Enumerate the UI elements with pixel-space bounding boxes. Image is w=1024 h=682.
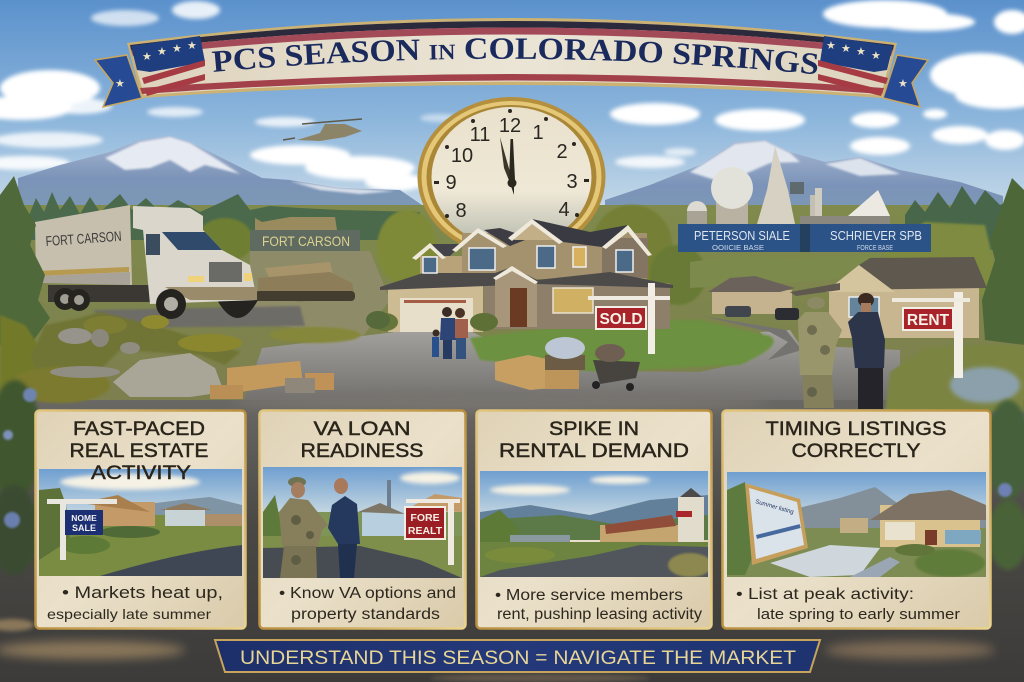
title: PCS SEASON IN COLORADO SPRINGS (212, 38, 818, 74)
scene: home for sale: NOME (71, 513, 97, 523)
bullet text (495, 587, 702, 623)
heading: READINESS (300, 440, 424, 462)
clock (418, 97, 606, 257)
bullet text: property standards (291, 606, 440, 623)
banner stars: ★ (871, 49, 881, 62)
moving boxes, left (210, 361, 334, 399)
banner stars: ★ (115, 77, 125, 90)
rocks (50, 328, 224, 397)
bullet text: • Markets heat up, (62, 583, 223, 602)
sky with clouds (0, 0, 1024, 240)
right shrubs (885, 178, 1024, 570)
scene: listing document and house: Summer listing (754, 499, 794, 516)
sign: Peterson and Schriever bases: PETERSON SIALE (694, 229, 790, 243)
mid houses (708, 276, 799, 320)
ground base (0, 205, 1024, 405)
bullet text: • List at peak activity: (736, 586, 914, 603)
truck (35, 205, 258, 319)
panel: fast-paced real estate activity (36, 410, 246, 628)
heading: CORRECTLY (792, 440, 920, 462)
road and driveway (93, 306, 900, 412)
panel: timing listings correctly (722, 410, 990, 628)
scene: listing document and house (727, 472, 986, 578)
sign: Fort Carson base (250, 217, 360, 251)
tank (255, 262, 355, 302)
heading: FAST-PACED (73, 418, 205, 440)
bullet text: • Know VA options and (279, 585, 456, 602)
sign: Peterson and Schriever bases: SCHRIEVER SPB (830, 229, 922, 243)
sign: Peterson and Schriever bases (678, 224, 931, 252)
banner stars (115, 39, 908, 90)
scene: rental complex (480, 471, 712, 577)
heading (766, 418, 946, 462)
heading: REAL ESTATE (70, 440, 208, 462)
family (432, 307, 468, 359)
truck: FORT CARSON (45, 228, 122, 249)
banner stars: ★ (856, 45, 866, 58)
heading (70, 418, 208, 484)
banner stars: ★ (157, 45, 167, 58)
real estate agent (848, 293, 885, 409)
banner stars: ★ (841, 42, 851, 55)
clock: 3 (566, 171, 578, 193)
heading: ACTIVITY (91, 462, 191, 484)
clock: 2 (556, 141, 568, 163)
heading: SPIKE IN (549, 418, 639, 440)
main house (372, 219, 673, 332)
banner stars: ★ (142, 50, 152, 63)
clock: 9 (445, 172, 457, 194)
air force base buildings (687, 146, 890, 224)
bullet text (47, 583, 223, 622)
banner stars: ★ (172, 42, 182, 55)
clock: 1 (532, 122, 544, 144)
soldier (798, 297, 842, 408)
scene: soldier and agent handshake (263, 467, 462, 578)
left foreground trees and bushes (0, 176, 390, 575)
banner stars: ★ (898, 77, 908, 90)
heading: VA LOAN (314, 418, 410, 440)
clock: 12 (499, 115, 521, 137)
bullet text: rent, pushinp leasing activity (497, 606, 702, 623)
mountain left (18, 136, 422, 222)
panel ground and dirt (0, 392, 1024, 682)
heading (300, 418, 424, 462)
clock: 8 (455, 200, 467, 222)
scene: soldier and agent handshake: FORE (410, 512, 440, 524)
bullet text (279, 585, 456, 623)
clock: 10 (451, 145, 473, 167)
bottom banner (215, 640, 820, 672)
panel: spike in rental demand (476, 410, 712, 628)
banner stars: ★ (187, 39, 197, 52)
banner ribbon (127, 18, 897, 98)
scene: home for sale: SALE (72, 523, 96, 533)
helicopter (283, 119, 362, 141)
sign: RENT: RENT (907, 312, 950, 329)
banner tail right (883, 55, 928, 107)
bullet text: • More service members (495, 587, 683, 604)
heading: RENTAL DEMAND (499, 440, 689, 462)
sign: Peterson and Schriever bases: FORCE BASE (857, 245, 893, 252)
moving boxes and cart, center (495, 337, 640, 391)
scene: home for sale (39, 469, 242, 576)
heading: TIMING LISTINGS (766, 418, 946, 440)
bullet text: especially late summer (47, 606, 211, 622)
mountain right (605, 140, 1003, 232)
title banner (94, 18, 930, 108)
sign: SOLD: SOLD (599, 311, 643, 328)
sign: Peterson and Schriever bases: OOIICIE BASE (712, 245, 764, 252)
sign: SOLD (588, 283, 670, 354)
bullet text: late spring to early summer (757, 606, 960, 623)
panel: VA loan readiness (260, 410, 466, 628)
heading (499, 418, 689, 462)
sign: RENT (892, 292, 970, 378)
sign: Fort Carson base: FORT CARSON (262, 233, 350, 249)
clock: 4 (558, 199, 570, 221)
banner tail left (95, 55, 142, 107)
bottom banner: UNDERSTAND THIS SEASON = NAVIGATE THE MARKET (240, 648, 796, 669)
distant tree line (28, 186, 1024, 340)
right rental house (790, 257, 987, 338)
banner stars: ★ (826, 39, 836, 52)
clock: 11 (470, 124, 490, 146)
bullet text (736, 586, 960, 623)
scene: soldier and agent handshake: REALT (408, 525, 443, 537)
